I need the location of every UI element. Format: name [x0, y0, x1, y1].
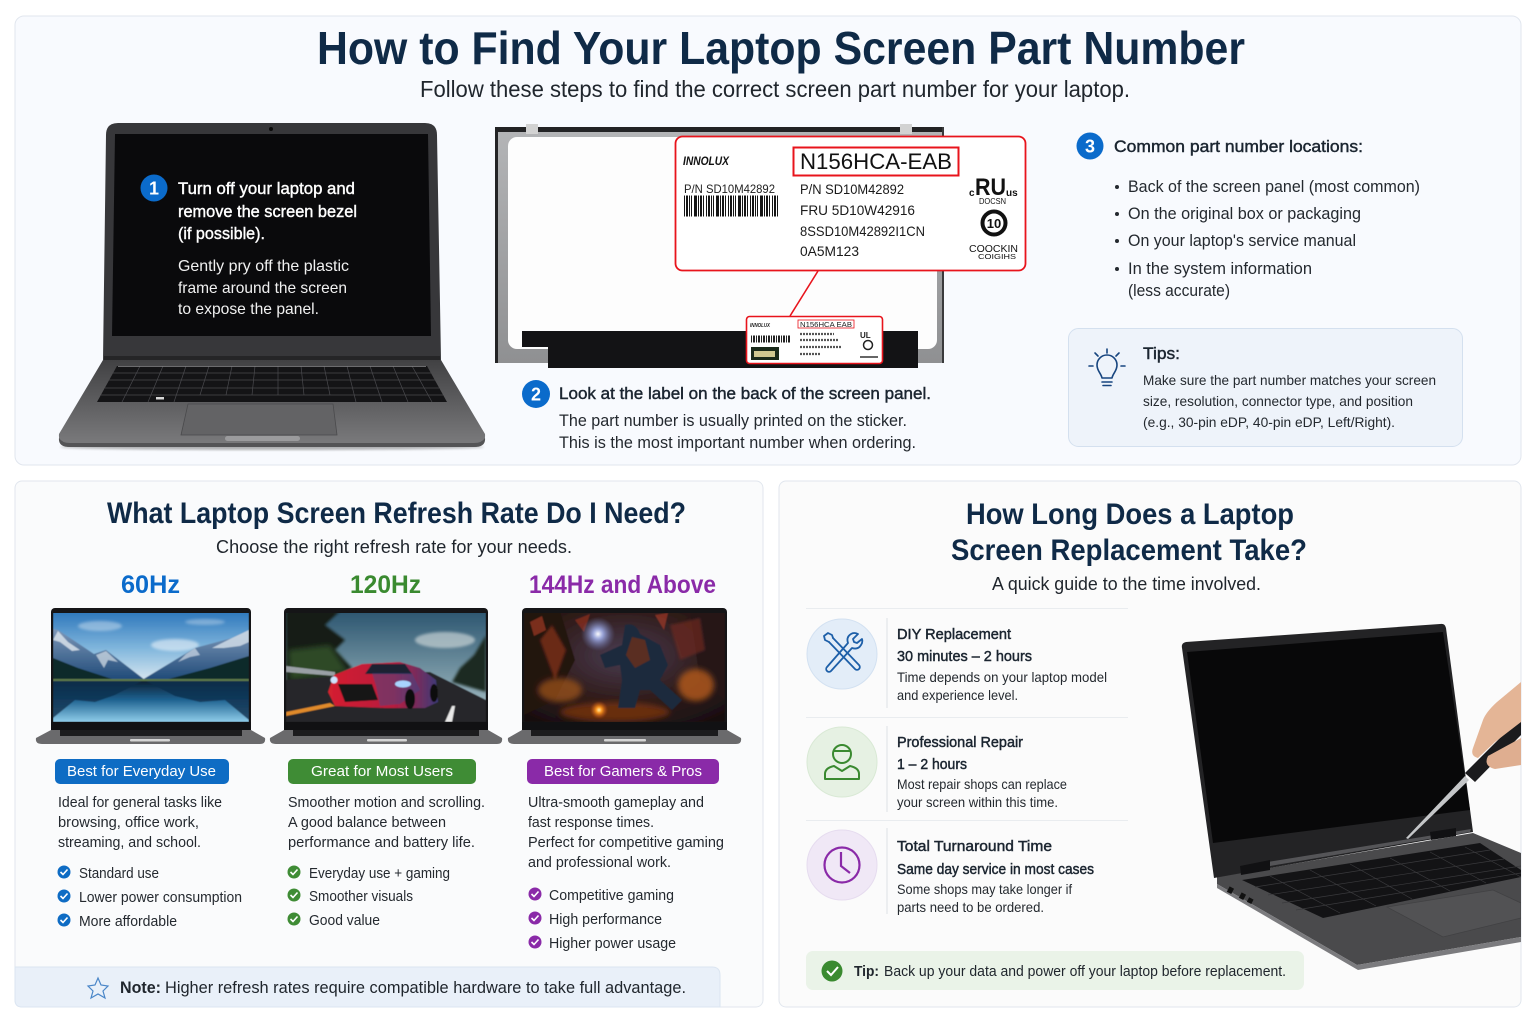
- subheading: Choose the right refresh rate for your needs.: [216, 536, 572, 557]
- checklist: Competitive gaming: [549, 887, 674, 904]
- step 2 heading: Look at the label on the back of the screen panel.: [559, 384, 931, 403]
- tips text: (e.g., 30-pin eDP, 40-pin eDP, Left/Right).: [1143, 414, 1395, 430]
- description: fast response times.: [528, 814, 654, 831]
- tips text: Make sure the part number matches your screen: [1143, 372, 1436, 388]
- panel frame: [495, 124, 944, 368]
- barcode: P/N SD10M42892: [684, 182, 775, 196]
- row text: and experience level.: [897, 687, 1018, 703]
- icon: light bulb: [1089, 349, 1125, 386]
- tip bar: [806, 951, 1304, 990]
- certification marks: [969, 174, 1018, 261]
- checklist: Lower power consumption: [79, 889, 242, 906]
- step 2: [522, 380, 931, 452]
- note text: Note:: [120, 978, 161, 997]
- step 1 description: frame around the screen: [178, 280, 347, 297]
- badge: Great for Most Users: [311, 763, 453, 780]
- panel: find part number: [15, 16, 1521, 465]
- description: Perfect for competitive gaming: [528, 834, 724, 851]
- laptop with car scene: [270, 608, 502, 744]
- description: Ultra-smooth gameplay and: [528, 794, 704, 811]
- row text: Most repair shops can replace: [897, 776, 1067, 792]
- step 1 description: Gently pry off the plastic: [178, 258, 349, 275]
- barcode: [684, 182, 778, 206]
- checklist: [528, 887, 676, 952]
- laptop with game scene: [508, 608, 741, 744]
- small label: INNOLUX: [750, 323, 771, 329]
- step 2 description: The part number is usually printed on the sticker.: [559, 412, 907, 430]
- label details: FRU 5D10W42916: [800, 202, 915, 218]
- badge: [288, 759, 476, 784]
- tip text: Back up your data and power off your laptop before replacement.: [884, 963, 1286, 980]
- subheading: A quick guide to the time involved.: [992, 574, 1261, 594]
- checklist: More affordable: [79, 913, 177, 930]
- certification marks: c: [969, 188, 975, 199]
- label details: 8SSD10M42892I1CN: [800, 223, 925, 239]
- badge: Best for Gamers & Pros: [544, 763, 702, 780]
- hand with screwdriver: [1406, 682, 1521, 839]
- step 3 badge: [1076, 132, 1104, 160]
- certification marks: RU: [975, 174, 1006, 201]
- badge: [527, 759, 719, 784]
- locations list: [1115, 178, 1420, 300]
- step 3 badge: 3: [1085, 136, 1095, 156]
- certification marks: DOCSN: [979, 197, 1006, 206]
- description: streaming, and school.: [58, 834, 201, 851]
- step 2 description: [559, 412, 916, 452]
- step 2 badge: [522, 380, 550, 408]
- step 1 heading: remove the screen bezel: [178, 203, 357, 221]
- row text: Professional Repair: [897, 735, 1023, 751]
- step 1 heading: Turn off your laptop and: [178, 180, 355, 198]
- laptop body: [59, 123, 485, 450]
- locations list: On your laptop's service manual: [1128, 232, 1356, 250]
- rate label: 144Hz and Above: [529, 571, 716, 599]
- column: 144Hz and above: [508, 571, 741, 952]
- small label: N156HCA EAB: [800, 322, 852, 329]
- column: 60Hz: [36, 571, 265, 930]
- callout label: [676, 136, 1026, 270]
- description: performance and battery life.: [288, 834, 475, 851]
- heading: [951, 498, 1307, 567]
- heading: Screen Replacement Take?: [951, 534, 1307, 567]
- row: professional repair: [807, 726, 1067, 812]
- locations list: In the system information: [1128, 260, 1312, 278]
- certification marks: COIGIHS: [978, 254, 1016, 261]
- column: 120Hz: [270, 571, 502, 929]
- locations list: Back of the screen panel (most common): [1128, 178, 1420, 196]
- step 1 badge: 1: [149, 178, 159, 198]
- badge: [55, 759, 229, 784]
- laptop with step 1: [59, 123, 485, 450]
- checklist: Higher power usage: [549, 935, 676, 952]
- row text: 30 minutes – 2 hours: [897, 649, 1032, 665]
- certification marks: COOCKIN: [969, 244, 1018, 255]
- row text: your screen within this time.: [897, 794, 1058, 810]
- description: Ideal for general tasks like: [58, 794, 222, 811]
- step 1 heading: [178, 180, 357, 243]
- checklist: Smoother visuals: [309, 888, 413, 905]
- step 3: [1076, 132, 1420, 300]
- note text: Higher refresh rates require compatible hardware to take full advantage.: [165, 978, 686, 997]
- tips heading: Tips:: [1143, 344, 1180, 363]
- rate label: 60Hz: [121, 571, 180, 599]
- description: and professional work.: [528, 854, 671, 871]
- badge: Best for Everyday Use: [67, 763, 216, 780]
- brand: INNOLUX: [683, 154, 730, 168]
- heading: What Laptop Screen Refresh Rate Do I Need?: [107, 497, 686, 530]
- label details: [800, 181, 925, 259]
- icon: star: [88, 978, 108, 998]
- row text: Time depends on your laptop model: [897, 669, 1107, 685]
- row text: Total Turnaround Time: [897, 839, 1052, 855]
- tips box: [1068, 328, 1462, 446]
- icon: technician: [807, 727, 877, 797]
- certification marks: 10: [987, 216, 1001, 231]
- panel: replacement time: [779, 481, 1521, 1007]
- part number highlighted: N156HCA-EAB: [800, 149, 952, 174]
- row text: [897, 839, 1094, 915]
- step 3 heading: Common part number locations:: [1114, 137, 1363, 156]
- rate label: 120Hz: [350, 571, 421, 599]
- checklist: [288, 865, 450, 929]
- checklist: [58, 865, 242, 930]
- step 1 description: to expose the panel.: [178, 301, 319, 318]
- title: How to Find Your Laptop Screen Part Number: [317, 22, 1245, 74]
- locations list: On the original box or packaging: [1128, 205, 1361, 223]
- row: DIY replacement: [807, 618, 1107, 708]
- heading: How Long Does a Laptop: [966, 498, 1294, 531]
- checklist: Everyday use + gaming: [309, 865, 450, 882]
- label details: P/N SD10M42892: [800, 181, 904, 197]
- small label: [746, 316, 882, 364]
- screen panel photo: [495, 124, 1026, 368]
- tips text: [1143, 372, 1436, 430]
- subtitle: Follow these steps to find the correct screen part number for your laptop.: [420, 76, 1130, 102]
- certification marks: us: [1006, 188, 1018, 199]
- icon: check: [822, 960, 842, 982]
- description: A good balance between: [288, 814, 446, 831]
- checklist: Standard use: [79, 865, 159, 882]
- checklist: High performance: [549, 911, 662, 928]
- row text: 1 – 2 hours: [897, 757, 967, 773]
- locations list: (less accurate): [1128, 282, 1230, 300]
- step 2 badge: 2: [531, 384, 541, 404]
- label details: 0A5M123: [800, 243, 859, 259]
- laptop with lake scene: [36, 608, 265, 744]
- connector line: [790, 271, 818, 316]
- row text: DIY Replacement: [897, 627, 1011, 643]
- description: [58, 794, 222, 851]
- tip text: Tip:: [854, 963, 879, 980]
- row: total turnaround: [807, 828, 1094, 915]
- laptop being opened with screwdriver: [1182, 624, 1521, 970]
- row text: [897, 627, 1107, 703]
- description: Smoother motion and scrolling.: [288, 794, 485, 811]
- description: [528, 794, 724, 871]
- step 1 heading: (if possible).: [178, 225, 265, 243]
- note bar: [15, 967, 720, 1007]
- icon: tools: [807, 619, 877, 689]
- checklist: Good value: [309, 912, 380, 929]
- row text: Same day service in most cases: [897, 862, 1094, 878]
- row text: Some shops may take longer if: [897, 881, 1072, 897]
- panel: refresh rate: [15, 481, 763, 1007]
- icon: clock: [807, 830, 877, 900]
- step 1 badge: [140, 174, 168, 202]
- row text: [897, 735, 1067, 810]
- step 2 description: This is the most important number when ordering.: [559, 434, 916, 452]
- step 1 description: [178, 258, 349, 318]
- small label: UL: [860, 331, 871, 340]
- laptop lid: [1182, 624, 1473, 878]
- laptop base: [1217, 833, 1521, 970]
- row text: parts need to be ordered.: [897, 899, 1044, 915]
- description: [288, 794, 485, 851]
- description: browsing, office work,: [58, 814, 199, 831]
- tips text: size, resolution, connector type, and position: [1143, 393, 1413, 409]
